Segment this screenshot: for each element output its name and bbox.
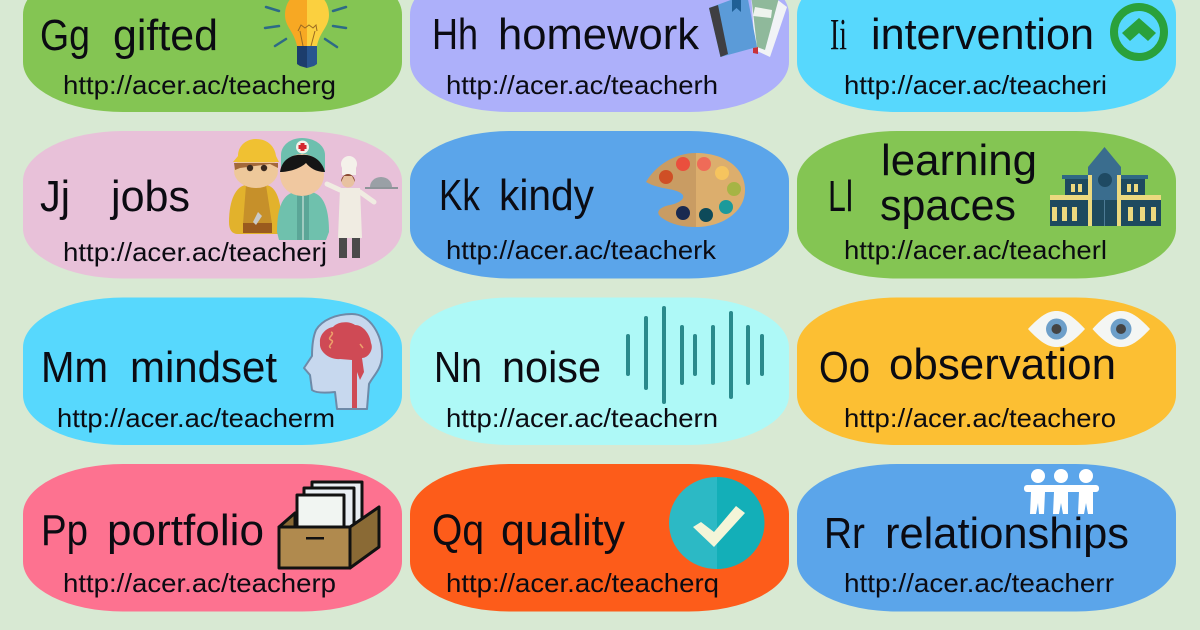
heading: Nn noise: noise <box>502 343 601 392</box>
panel: Qq quality <box>410 464 789 612</box>
heading: Mm mindset <box>41 343 277 392</box>
panel: Kk kindy <box>410 131 789 278</box>
heading: Ll learning spaces: spaces <box>880 181 1016 230</box>
heading: Ll learning spaces <box>828 136 1037 230</box>
panel background <box>797 464 1176 612</box>
link: http://acer.ac/teacherh <box>446 70 718 100</box>
icon: head with brain <box>304 314 382 409</box>
heading: Gg gifted <box>40 11 218 60</box>
heading: Nn noise: Nn <box>434 343 482 392</box>
heading: Kk kindy: kindy <box>499 171 594 220</box>
heading: Ii intervention: Ii <box>830 10 847 59</box>
panel: Ll learning spaces <box>797 131 1176 278</box>
heading: Hh homework: homework <box>498 10 700 59</box>
panel background <box>797 298 1176 445</box>
panel: Nn noise <box>410 298 789 445</box>
heading: Ll learning spaces: Ll <box>828 172 853 221</box>
icon: three linked people <box>1024 469 1099 514</box>
panel: Ii intervention <box>797 0 1176 112</box>
panel background <box>23 464 402 612</box>
heading: Qq quality: Qq <box>432 506 484 555</box>
heading: Kk kindy: Kk <box>439 171 481 220</box>
heading: Ii intervention: intervention <box>871 10 1094 59</box>
panel: Gg gifted <box>23 0 402 112</box>
panel background <box>23 0 402 112</box>
link: http://acer.ac/teacherr <box>844 568 1114 598</box>
heading: Hh homework: Hh <box>432 10 478 59</box>
icon: workers <box>229 138 398 258</box>
icon: check badge <box>669 477 765 569</box>
heading: Mm mindset: mindset <box>130 343 277 392</box>
panel background <box>23 298 402 445</box>
panel background <box>410 298 789 445</box>
link: http://acer.ac/teacheri <box>844 70 1107 100</box>
icon: light bulb <box>265 0 346 68</box>
icon: eyes <box>1028 311 1150 347</box>
heading: Kk kindy <box>439 171 594 220</box>
panel background <box>797 131 1176 278</box>
panel background <box>23 131 402 278</box>
panel: Jj jobs <box>23 131 402 278</box>
construction worker <box>229 139 282 234</box>
heading: Rr relationships: Rr <box>824 509 865 558</box>
icon: school building <box>1050 147 1161 226</box>
panel background <box>410 464 789 612</box>
icon: books <box>709 0 787 57</box>
heading: Pp portfolio: Pp <box>41 506 88 555</box>
heading: Oo observation: observation <box>889 340 1116 389</box>
heading: Jj jobs: Jj <box>40 172 70 221</box>
panel: Rr relationships <box>797 464 1176 612</box>
link: http://acer.ac/teacherq <box>446 568 719 598</box>
link: http://acer.ac/teachern <box>446 403 718 433</box>
panel: Pp portfolio <box>23 464 402 612</box>
heading: Gg gifted: Gg <box>40 11 90 60</box>
link: http://acer.ac/teacherg <box>63 70 336 100</box>
link: http://acer.ac/teachero <box>844 403 1116 433</box>
heading: Mm mindset: Mm <box>41 343 108 392</box>
panel: Hh homework <box>410 0 789 112</box>
panel: Mm mindset <box>23 298 402 445</box>
nurse <box>277 138 329 240</box>
icon: paint palette <box>646 153 745 227</box>
panel background <box>797 0 1176 112</box>
link: http://acer.ac/teacherm <box>57 403 335 433</box>
panel background <box>410 131 789 278</box>
heading: Qq quality: quality <box>501 506 625 555</box>
heading: Qq quality <box>432 506 625 555</box>
heading: Oo observation: Oo <box>819 343 870 392</box>
link: http://acer.ac/teacherl <box>844 235 1107 265</box>
link: http://acer.ac/teacherk <box>446 235 717 265</box>
chef <box>327 156 398 258</box>
icon: file box <box>279 482 379 568</box>
icon: sound wave <box>628 308 762 402</box>
icon: green up chevron <box>1114 7 1164 57</box>
heading: Jj jobs: jobs <box>109 172 190 221</box>
heading: Pp portfolio: portfolio <box>107 506 264 555</box>
panel background <box>410 0 789 112</box>
heading: Rr relationships: relationships <box>885 509 1129 558</box>
link: http://acer.ac/teacherj <box>63 237 327 267</box>
heading: Gg gifted: gifted <box>113 11 218 60</box>
heading: Jj jobs <box>40 172 190 221</box>
heading: Ll learning spaces: learning <box>881 136 1037 185</box>
heading: Nn noise <box>434 343 601 392</box>
link: http://acer.ac/teacherp <box>63 568 336 598</box>
panel: Oo observation <box>797 298 1176 445</box>
